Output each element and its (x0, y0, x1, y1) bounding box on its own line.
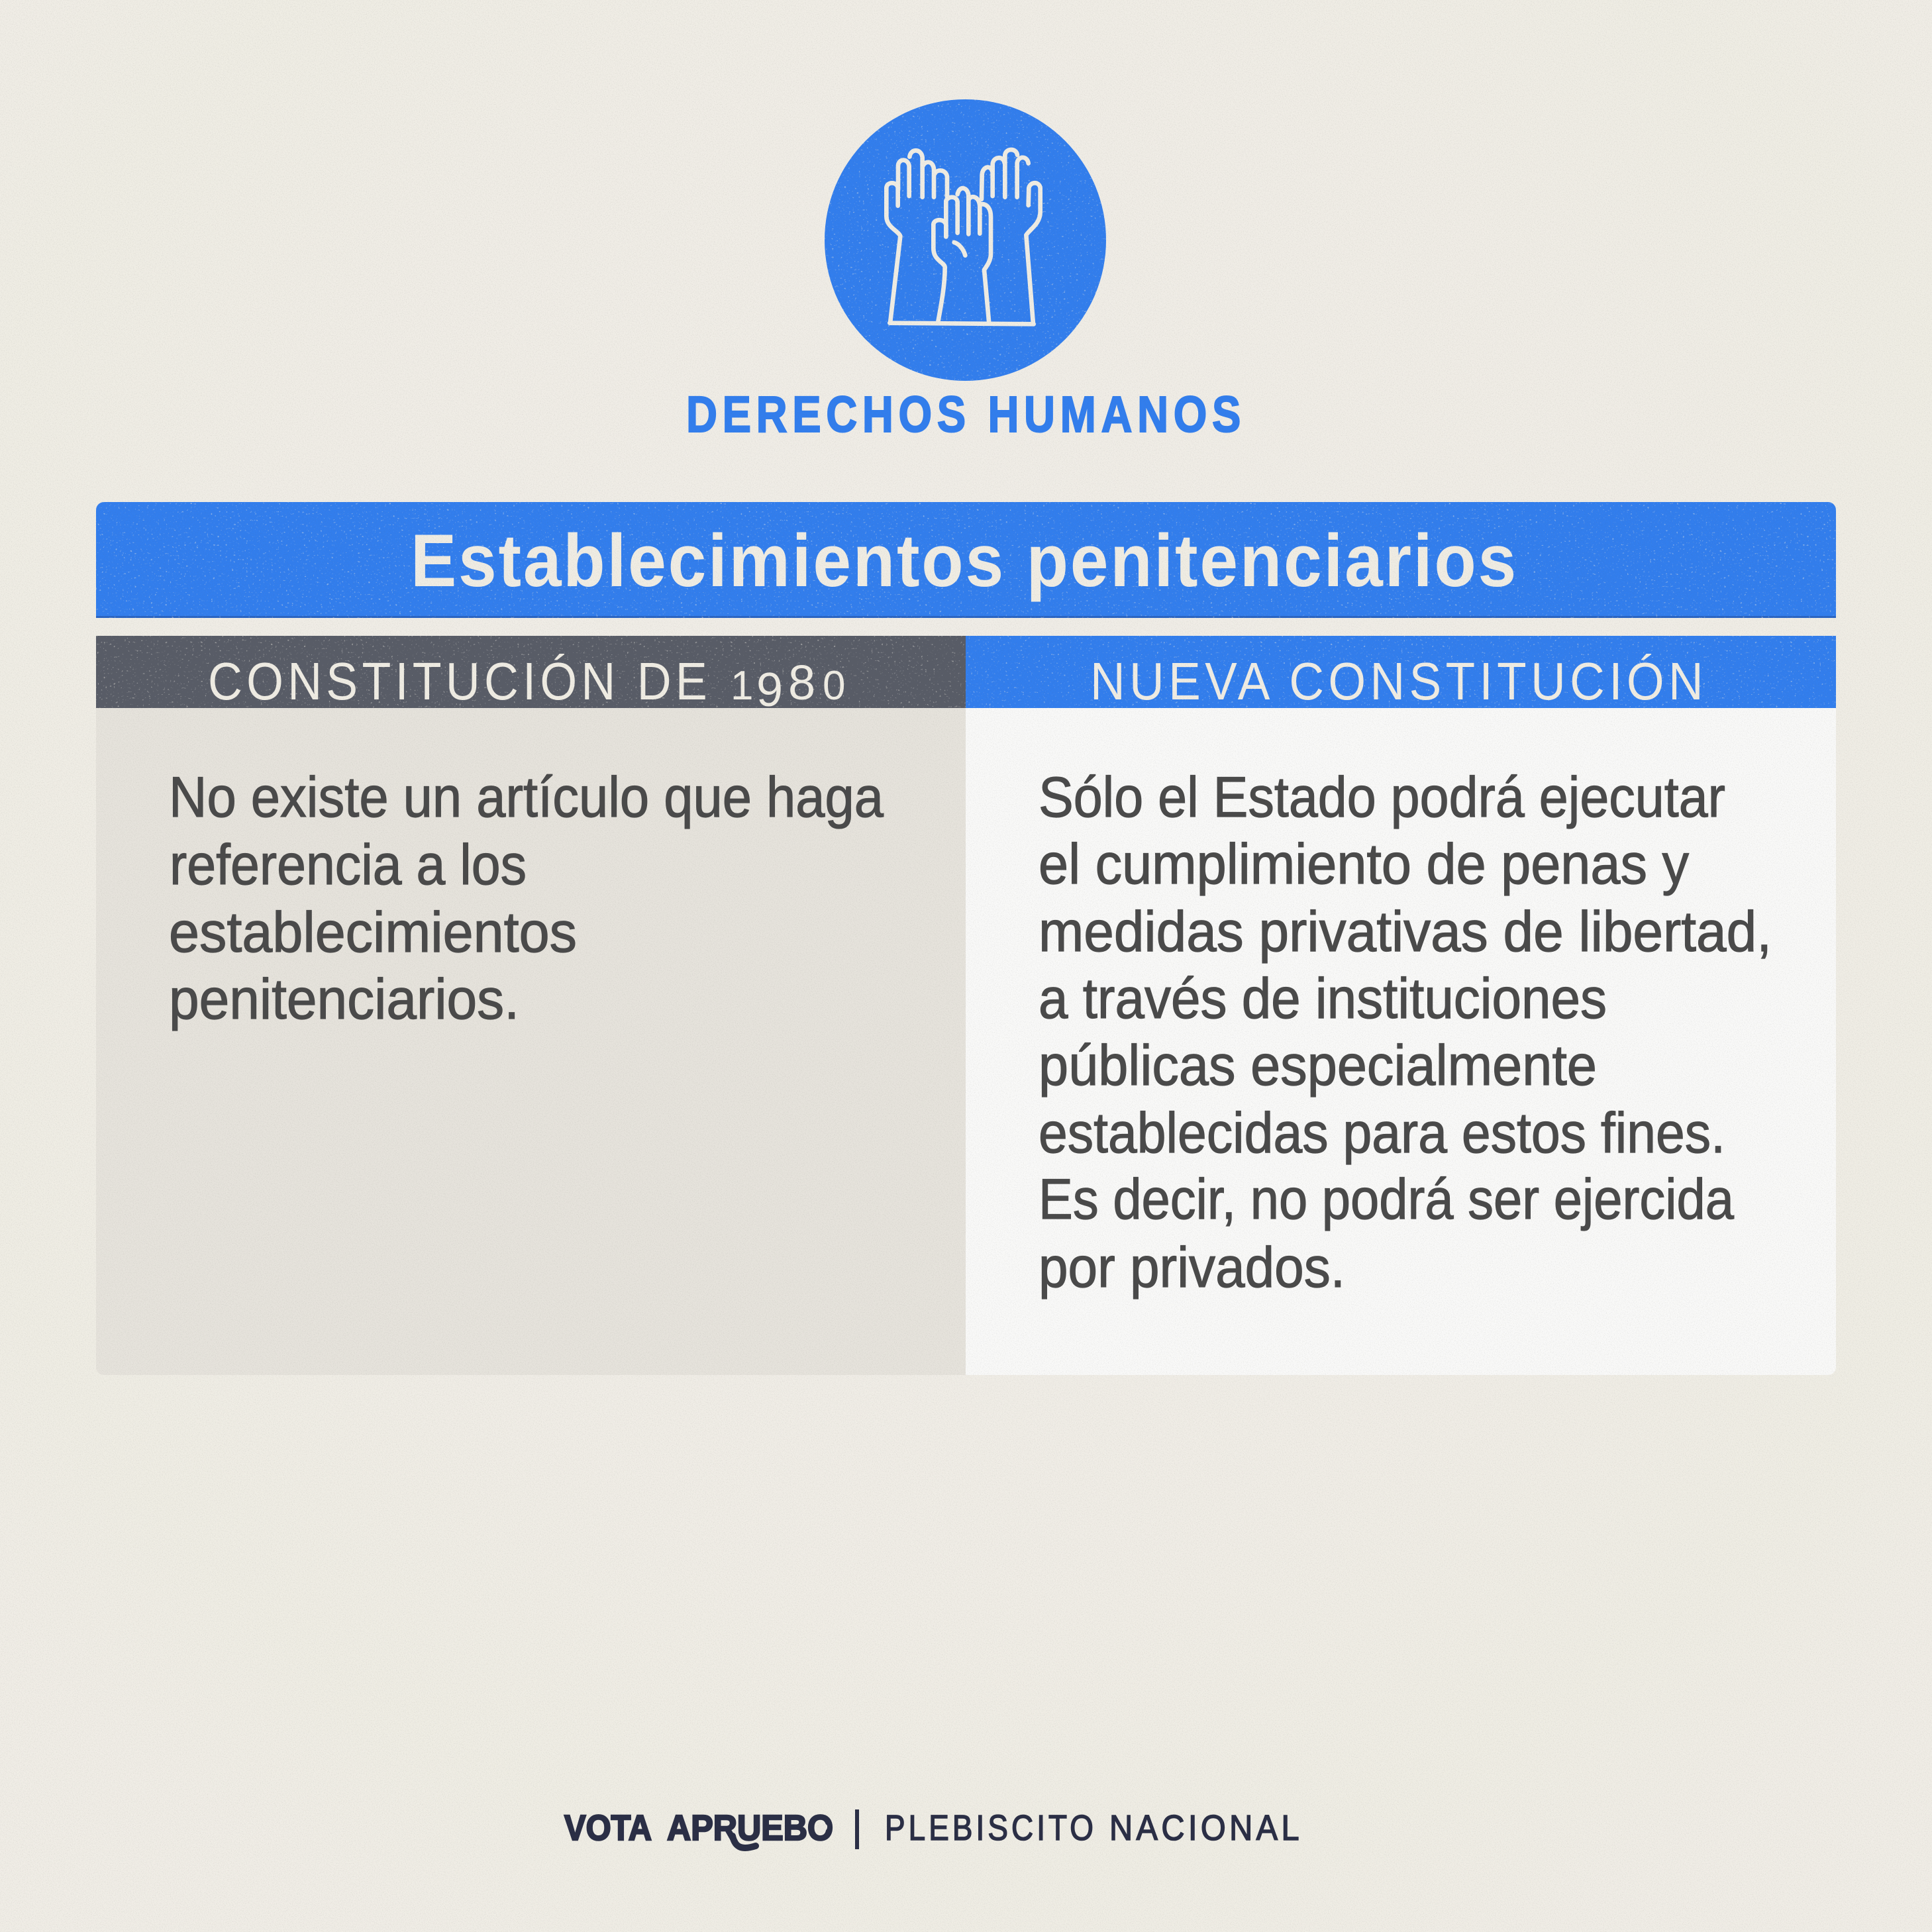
body text: right column (1039, 766, 1772, 1299)
heading: category name: DERECHOS HUMANOS (686, 386, 1246, 443)
footer logo: Vota Apruebo: VOTA (564, 1808, 652, 1848)
body text: right column: Sólo el Estado podrá ejecutar (1039, 766, 1725, 829)
column header: Constitución de 1980: 1 (731, 663, 753, 709)
column header: Constitución de 1980: 0 (823, 663, 845, 709)
body text: right column: por privados. (1039, 1236, 1345, 1299)
body text: left column: penitenciarios. (169, 968, 519, 1031)
title bar (96, 502, 1836, 618)
body text: right column: Es decir, no podrá ser ejercida (1039, 1168, 1734, 1231)
body text: left column (169, 766, 884, 1031)
body text: left column: establecimientos (169, 901, 577, 964)
column header: Nueva Constitución: NUEVA CONSTITUCIÓN (1090, 652, 1707, 711)
body text: right column: establecidas para estos fines. (1039, 1101, 1725, 1165)
footer: Vota Apruebo / Plebiscito Nacional (564, 1808, 1303, 1849)
column header: Constitución de 1980: 9 (756, 664, 783, 717)
panel: Constitución de 1980 (96, 636, 966, 1375)
footer divider (855, 1809, 859, 1849)
footer logo: Vota Apruebo (564, 1808, 833, 1848)
body text: left column: referencia a los (170, 833, 527, 897)
body text: right column: medidas privativas de libertad, (1039, 900, 1772, 964)
footer logo: Vota Apruebo: APRUEBO (667, 1808, 833, 1848)
panel: Nueva Constitución (966, 636, 1836, 1375)
body text: left column: No existe un artículo que haga (169, 766, 884, 829)
column header: Constitución de 1980 (96, 636, 966, 717)
body text: right column: el cumplimiento de penas y (1039, 833, 1689, 896)
panel body: right (966, 708, 1836, 1375)
column header: Constitución de 1980: 8 (788, 655, 815, 710)
footer text: Plebiscito Nacional: PLEBISCITO (885, 1808, 1097, 1848)
footer text: Plebiscito Nacional: NACIONAL (1109, 1808, 1303, 1848)
column header: Constitución de 1980: CONSTITUCIÓN DE (208, 652, 711, 711)
title bar: Establecimientos penitenciarios (411, 519, 1518, 602)
icon: raised hands in blue circle (825, 99, 1106, 381)
body text: right column: públicas especialmente (1039, 1034, 1597, 1097)
column header: Nueva Constitución (966, 636, 1836, 711)
body text: right column: a través de instituciones (1039, 967, 1607, 1031)
footer text: Plebiscito Nacional (885, 1808, 1303, 1848)
panel body: left (96, 708, 966, 1375)
